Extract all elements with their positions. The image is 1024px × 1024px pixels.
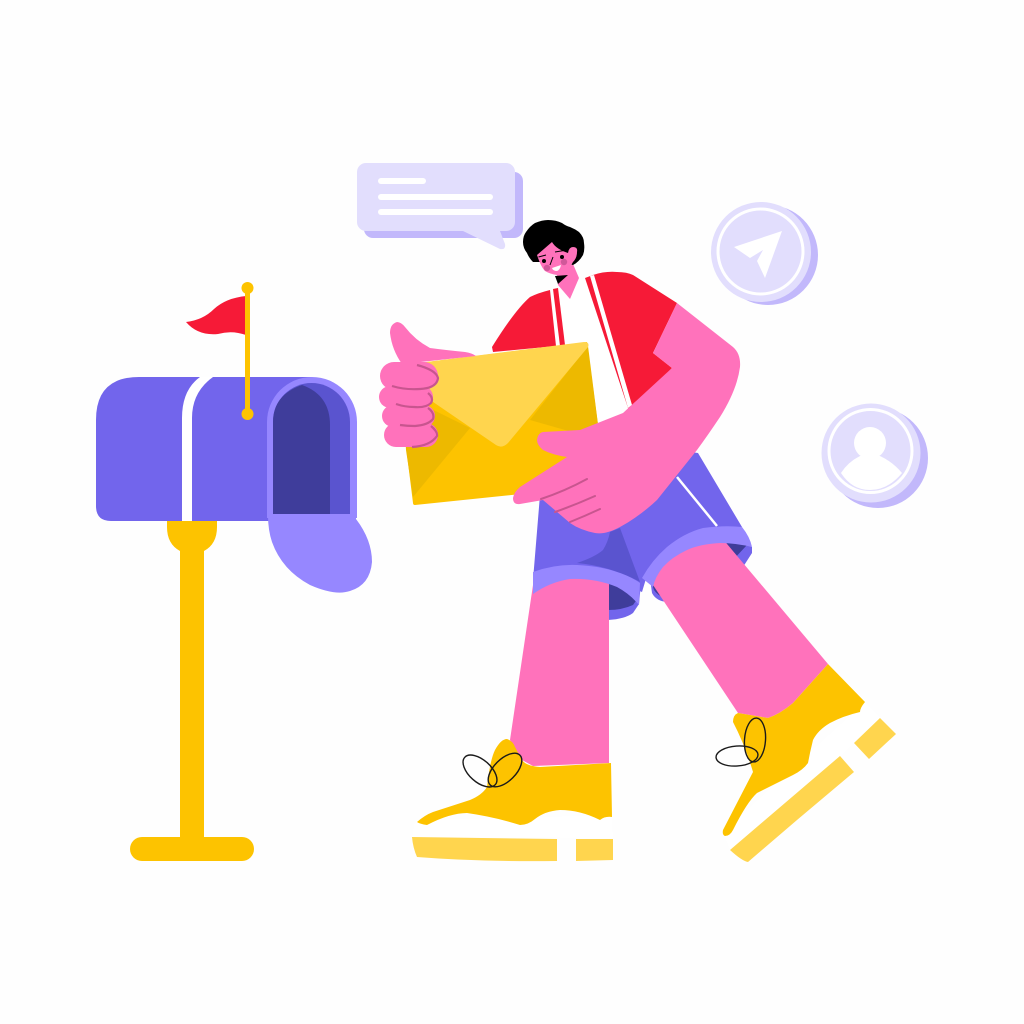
shorts	[533, 440, 752, 605]
shirt	[552, 278, 634, 440]
white band	[182, 377, 213, 521]
person	[379, 220, 896, 862]
mailbox body	[96, 377, 312, 521]
left leg	[510, 573, 609, 766]
left shoe	[412, 739, 613, 861]
head	[523, 220, 584, 275]
envelope	[395, 342, 607, 505]
speech bubble	[357, 163, 523, 249]
icon: send coin	[711, 202, 818, 305]
icon: user coin	[822, 404, 928, 508]
mailbox post	[130, 521, 254, 861]
mailbox	[96, 282, 372, 861]
mailbox door opening	[267, 377, 357, 518]
back of shorts legs	[605, 535, 752, 620]
mailbox flap	[268, 515, 372, 593]
left hand fist	[379, 322, 476, 447]
flag	[186, 282, 254, 420]
jacket	[492, 272, 677, 414]
neck	[555, 264, 579, 299]
face	[537, 242, 577, 275]
right leg	[653, 536, 828, 718]
right shoe	[715, 664, 896, 862]
right arm and hand	[513, 303, 740, 533]
